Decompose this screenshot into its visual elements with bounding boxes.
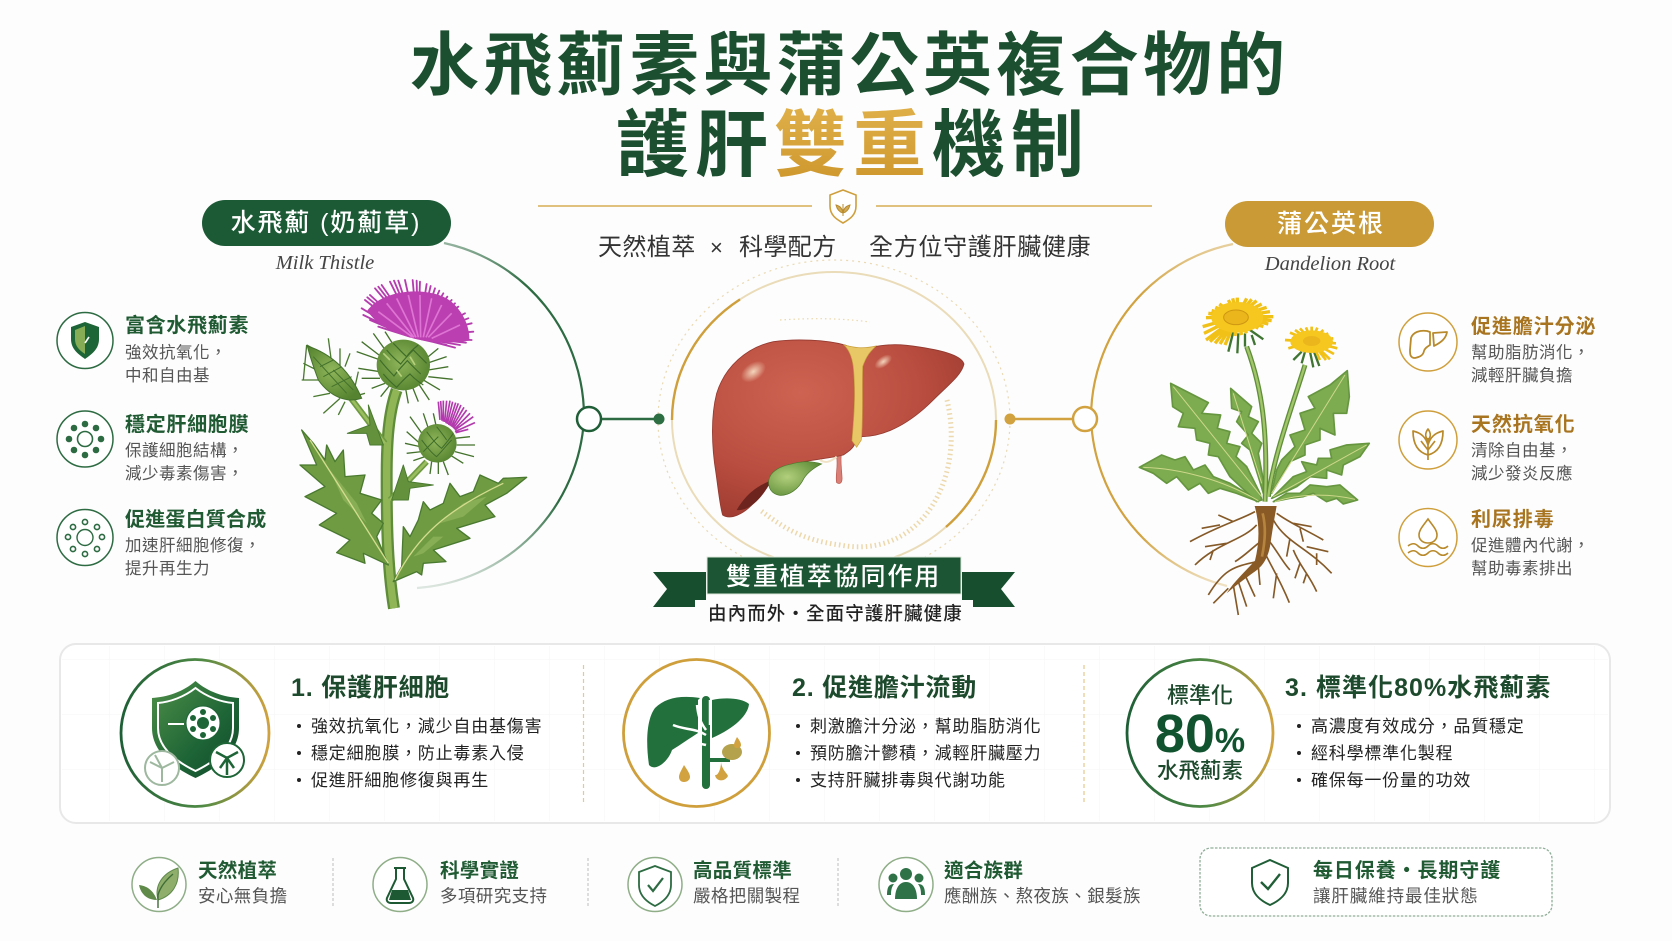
bullets 1: 強效抗氧化，減少自由基傷害 <box>311 717 542 736</box>
callout: daily care <box>1200 848 1552 916</box>
title <box>410 27 1290 186</box>
bullets 3: 確保每一份量的功效 <box>1311 771 1471 790</box>
subtitle: 天然植萃 <box>598 234 696 261</box>
footer: 天然植萃: 天然植萃 <box>198 859 277 882</box>
right benefit: 天然抗氧化: 天然抗氧化 <box>1471 412 1576 436</box>
left benefit: 穩定肝細胞膜 <box>57 411 249 483</box>
subtitle: 全方位守護肝臟健康 <box>869 234 1091 261</box>
bullets 2 <box>796 717 1041 790</box>
footer dividers <box>333 858 838 908</box>
dandelion orbit arc <box>1091 244 1233 586</box>
footer: 適合族群 <box>879 858 1141 912</box>
footer: 天然植萃: 安心無負擔 <box>198 886 288 906</box>
left benefit: 富含水飛薊素: 中和自由基 <box>125 366 210 385</box>
label: Milk Thistle: Milk Thistle <box>275 252 374 274</box>
title: 護肝雙重機制 <box>616 105 1090 186</box>
left benefit: 穩定肝細胞膜: 減少毒素傷害， <box>125 464 244 483</box>
right benefit: 天然抗氧化 <box>1399 411 1576 483</box>
bullets 2: 支持肝臟排毒與代謝功能 <box>810 771 1006 790</box>
mechanism 3: 80% badge: 水飛薊素 <box>1157 759 1243 783</box>
footer: 高品質標準 <box>628 858 800 912</box>
heading 2: 2. 促進膽汁流動 <box>792 674 977 702</box>
left benefit: 富含水飛薊素: 強效抗氧化， <box>125 343 227 362</box>
footer: 科學實證 <box>373 858 547 912</box>
right benefit: 利尿排毒: 促進體內代謝， <box>1471 536 1590 555</box>
left benefit: 富含水飛薊素 <box>57 312 249 385</box>
mechanism 3: 80% badge: 標準化 <box>1167 683 1233 708</box>
footer: 高品質標準: 高品質標準 <box>693 859 792 882</box>
left benefit: 穩定肝細胞膜: 保護細胞結構， <box>125 441 244 460</box>
panel: three mechanisms <box>60 644 1610 823</box>
right benefit: 天然抗氧化: 減少發炎反應 <box>1471 463 1573 483</box>
mechanism 1: protect liver cells <box>121 660 269 806</box>
ribbon banner: 由內而外・全面守護肝臟健康 <box>708 603 963 624</box>
heading 1: 1. 保護肝細胞 <box>291 674 450 702</box>
bullets 1 <box>297 717 542 790</box>
pill: milk thistle: 水飛薊 (奶薊草) <box>231 209 421 237</box>
ribbon banner <box>653 557 1015 624</box>
bullets 3: 高濃度有效成分，品質穩定 <box>1311 717 1525 736</box>
mechanism 2: bile flow <box>624 660 770 806</box>
right benefit: 利尿排毒: 利尿排毒 <box>1471 508 1555 531</box>
right benefit: 促進膽汁分泌: 幫助脂肪消化， <box>1471 343 1590 362</box>
heading 3: 3. 標準化80%水飛薊素 <box>1285 674 1551 702</box>
mechanism 3: 80% badge: 80% <box>1155 704 1245 764</box>
left benefit: 促進蛋白質合成: 提升再生力 <box>125 559 210 578</box>
left benefit: 促進蛋白質合成: 促進蛋白質合成 <box>125 507 266 531</box>
subtitle: 科學配方 <box>739 234 837 261</box>
right benefit: 促進膽汁分泌 <box>1399 313 1596 385</box>
footer: 科學實證: 科學實證 <box>440 859 519 882</box>
illustration: milk thistle <box>300 280 527 608</box>
bullets 1: 穩定細胞膜，防止毒素入侵 <box>311 744 525 763</box>
footer: 適合族群: 適合族群 <box>944 859 1023 882</box>
liver emblem rings <box>658 260 1010 580</box>
milk thistle orbit arc <box>417 243 584 588</box>
pill: milk thistle <box>202 200 451 246</box>
pill: dandelion root: 蒲公英根 <box>1277 210 1385 238</box>
footer: 高品質標準: 嚴格把關製程 <box>693 886 800 906</box>
bullets 2: 預防膽汁鬱積，減輕肝臟壓力 <box>810 744 1041 763</box>
label: Dandelion Root: Dandelion Root <box>1264 253 1396 275</box>
right benefit: 天然抗氧化: 清除自由基， <box>1471 441 1573 460</box>
right benefit: 促進膽汁分泌: 促進膽汁分泌 <box>1471 315 1596 338</box>
liver illustration <box>712 340 964 517</box>
illustration: dandelion <box>1139 298 1369 615</box>
title: 水飛薊素與蒲公英複合物的 <box>410 27 1290 104</box>
bullets 3: 經科學標準化製程 <box>1311 744 1453 763</box>
subtitle <box>598 234 1091 261</box>
subtitle: × <box>710 235 723 260</box>
pill: dandelion root <box>1225 201 1434 247</box>
left benefit: 促進蛋白質合成: 加速肝細胞修復， <box>125 536 261 555</box>
left connector <box>577 407 664 431</box>
ribbon banner: 雙重植萃協同作用 <box>726 563 941 591</box>
mechanism 3: 80% badge <box>1127 660 1273 806</box>
right benefit: 利尿排毒: 幫助毒素排出 <box>1471 559 1573 578</box>
right benefit: 促進膽汁分泌: 減輕肝臟負擔 <box>1471 366 1573 385</box>
bullets 2: 刺激膽汁分泌，幫助脂肪消化 <box>810 717 1041 736</box>
left benefit: 富含水飛薊素: 富含水飛薊素 <box>125 313 249 337</box>
footer: 天然植萃 <box>132 858 288 912</box>
left benefit: 穩定肝細胞膜: 穩定肝細胞膜 <box>125 412 249 436</box>
right connector <box>1004 407 1097 431</box>
footer: 科學實證: 多項研究支持 <box>440 886 547 906</box>
divider with shield emblem <box>538 190 1152 223</box>
bullets 1: 促進肝細胞修復與再生 <box>311 771 489 790</box>
callout: daily care: 讓肝臟維持最佳狀態 <box>1313 886 1479 906</box>
left benefit: 促進蛋白質合成 <box>57 507 266 578</box>
footer: 適合族群: 應酬族、熬夜族、銀髮族 <box>944 886 1141 906</box>
callout: daily care: 每日保養・長期守護 <box>1313 859 1501 882</box>
bullets 3 <box>1297 717 1525 790</box>
right benefit: 利尿排毒 <box>1399 508 1590 578</box>
